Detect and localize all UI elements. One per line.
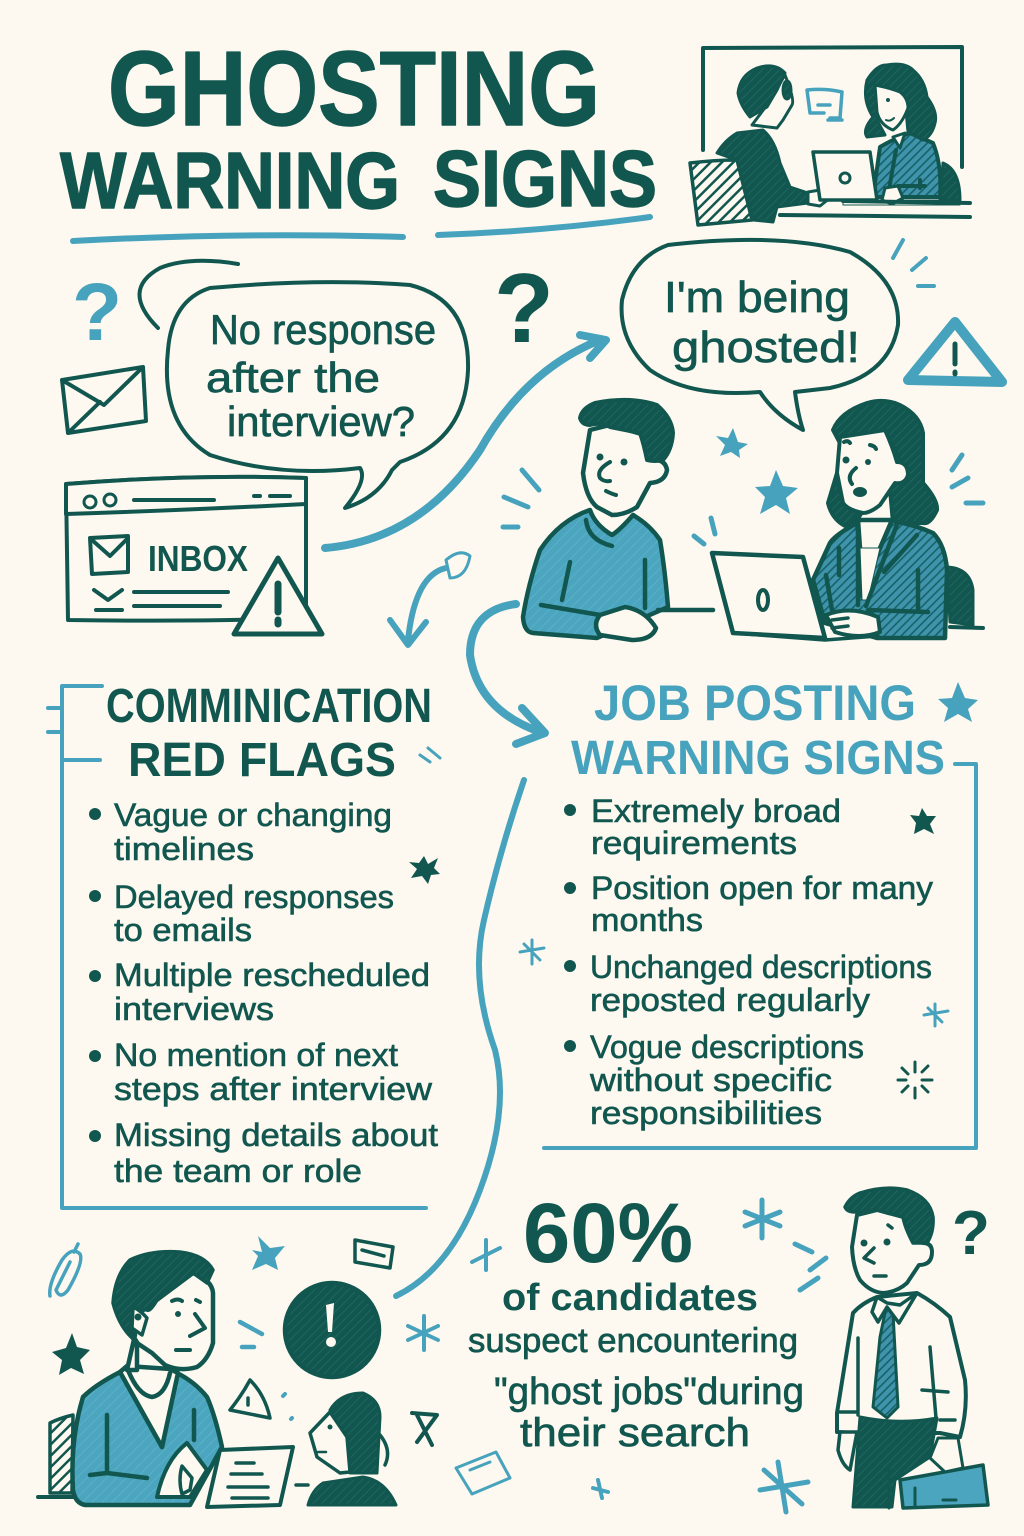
bullet list: communication: the team or role [114, 1153, 362, 1189]
arrow: to communication [390, 553, 470, 645]
speech bubble: no response: interview? [227, 398, 415, 445]
heading: job posting: WARNING SIGNS [571, 732, 945, 785]
bullet list: communication: Delayed responses [114, 879, 394, 915]
arrow: inbox to bubble [325, 335, 606, 548]
bullet list: job posting: without specific [589, 1062, 832, 1098]
speech bubble: being ghosted: ghosted! [672, 323, 860, 372]
inbox window: INBOX [148, 538, 248, 579]
bullet list: job posting: months [591, 902, 703, 938]
title: SIGNS [433, 134, 657, 223]
bullet list: communication: steps after interview [114, 1071, 433, 1107]
doodles: right panel [520, 808, 948, 1098]
bullet list: job posting: Unchanged descriptions [590, 949, 932, 985]
doodles: left panel [409, 748, 440, 884]
inbox window [66, 477, 322, 634]
bullet list: communication: interviews [114, 991, 274, 1027]
stat caption [468, 1277, 804, 1455]
speech bubble: being ghosted: I'm being [664, 273, 850, 322]
bullet list: job posting: Position open for many [591, 870, 933, 906]
panel: communication red flags [48, 680, 438, 1208]
bullet list: communication: Vague or changing [114, 797, 392, 833]
illustration: man with briefcase: ? [952, 1199, 990, 1268]
stat: 60% [468, 1186, 804, 1455]
speech bubble: being ghosted [622, 240, 898, 430]
stat caption: suspect encountering [468, 1322, 798, 1360]
icon: warning triangle top right [893, 240, 1002, 382]
bullet list: job posting: requirements [591, 825, 797, 861]
illustration: man and woman at laptop [503, 400, 983, 640]
stat: 60%: 60% [523, 1186, 693, 1280]
icon: big question mark: ? [494, 253, 554, 363]
connector: wavy line [396, 780, 524, 1296]
illustration: man with briefcase [745, 1188, 990, 1512]
heading: communication red flags [106, 680, 432, 787]
stat caption: of candidates [502, 1277, 758, 1319]
title: WARNING [60, 136, 400, 225]
icon: envelope [62, 367, 146, 433]
bullet list: communication [89, 797, 438, 1189]
heading: communication red flags: COMMINICATION [106, 680, 432, 733]
illustration: man and woman bottom left [38, 1236, 608, 1507]
heading: job posting [571, 675, 978, 785]
icon: question mark: ? [72, 267, 122, 358]
arrow: to job posting [470, 604, 545, 744]
arc [139, 261, 238, 328]
bullet list: job posting: responsibilities [590, 1095, 822, 1131]
title: GHOSTING [108, 30, 600, 148]
panel: job posting warning signs [544, 675, 978, 1148]
speech bubble: no response [167, 282, 468, 508]
stat caption: "ghost jobs"during [494, 1371, 804, 1413]
bullet list: communication: No mention of next [114, 1037, 398, 1073]
stat caption: their search [520, 1411, 750, 1455]
bullet list: job posting: reposted regularly [590, 982, 870, 1018]
bullet list: communication: timelines [114, 831, 254, 867]
heading: communication red flags: RED FLAGS [128, 734, 396, 787]
bullet list: communication: Missing details about [114, 1117, 438, 1153]
heading: job posting: JOB POSTING [594, 675, 916, 731]
bullet list: communication: Multiple rescheduled [114, 957, 430, 993]
speech bubble: no response: after the [206, 354, 380, 401]
bullet list: job posting: Vogue descriptions [590, 1029, 864, 1065]
stars [716, 428, 798, 514]
bullet list: job posting: Extremely broad [591, 793, 841, 829]
illustration: interview in frame [690, 47, 970, 225]
speech bubble: no response: No response [210, 306, 436, 353]
bullet list: communication: to emails [114, 912, 252, 948]
bullet list: job posting [564, 793, 933, 1131]
title [60, 30, 657, 241]
